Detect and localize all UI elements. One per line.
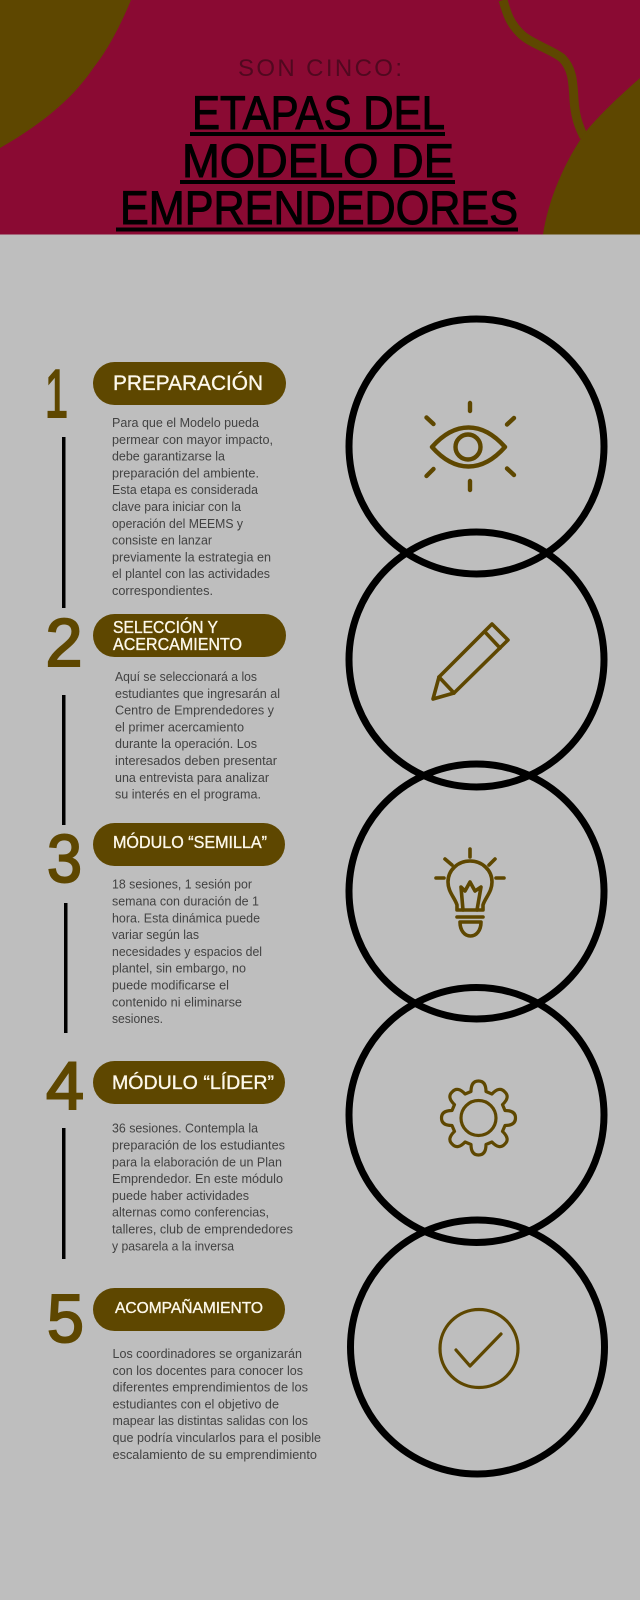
body text 3: [112, 877, 262, 1026]
body text 1: Esta etapa es considerada: [112, 482, 259, 497]
decorative blob: bottom right: [543, 78, 640, 234]
step 1: [45, 356, 286, 608]
heading pill: selección y acercamiento: ACERCAMIENTO: [113, 634, 242, 654]
body text 2: su interés en el programa.: [115, 787, 261, 802]
step 2: [46, 605, 286, 825]
body text 5: con los docentes para conocer los: [112, 1363, 303, 1378]
decorative blob: top left: [0, 0, 131, 148]
title: MODELO DE: [182, 134, 454, 187]
heading pill: acompañamiento: [93, 1288, 285, 1331]
body text 4: talleres, club de emprendedores: [112, 1222, 293, 1236]
overlapping circles chain: [349, 319, 604, 1474]
icon: pencil: [433, 624, 508, 699]
body text 2: interesados deben presentar: [115, 753, 278, 768]
step 5: [47, 1281, 321, 1462]
connector line 4: [62, 1128, 66, 1259]
body text 1: consiste en lanzar: [112, 533, 213, 548]
body text 3: variar según las: [112, 927, 199, 942]
icon: check mark in circle: [440, 1310, 518, 1388]
body text 3: hora. Esta dinámica puede: [112, 910, 260, 925]
heading pill: módulo líder: MÓDULO “LÍDER”: [112, 1071, 274, 1094]
number 2: 2: [46, 605, 82, 681]
body text 4: preparación de los estudiantes: [112, 1138, 285, 1152]
body text 1: clave para iniciar con la: [112, 499, 242, 514]
body text 1: operación del MEEMS y: [112, 516, 243, 531]
body text 5: [112, 1346, 321, 1462]
body text 2: estudiantes que ingresarán al: [115, 686, 280, 701]
body text 5: escalamiento de su emprendimiento: [112, 1447, 317, 1462]
body text 5: que podría vincularlos para el posible: [112, 1430, 321, 1445]
heading pill: módulo semilla: MÓDULO “SEMILLA”: [113, 831, 267, 852]
header banner: [0, 0, 640, 234]
body text 5: estudiantes con el objetivo de: [112, 1396, 279, 1411]
body text 3: 18 sesiones, 1 sesión por: [112, 877, 253, 892]
body text 1: el plantel con las actividades: [112, 566, 270, 581]
body text 2: Centro de Emprendedores y: [115, 703, 274, 718]
connector line 2: [62, 695, 66, 825]
body text 5: mapear las distintas salidas con los: [112, 1413, 308, 1428]
heading pill: selección y acercamiento: SELECCIÓN Y: [113, 616, 218, 637]
body text 4: 36 sesiones. Contempla la: [112, 1121, 259, 1136]
title: [116, 86, 518, 234]
body text 3: semana con duración de 1: [112, 894, 259, 908]
connector line 1: [62, 437, 66, 608]
heading pill: módulo líder: [93, 1061, 285, 1104]
body text 2: el primer acercamiento: [115, 719, 244, 734]
body text 4: y pasarela a la inversa: [112, 1238, 235, 1253]
heading pill: preparación: [93, 362, 286, 405]
step 4: [46, 1048, 293, 1259]
icon: light bulb: [436, 849, 504, 936]
body text 1: previamente la estrategia en: [112, 549, 271, 564]
connector line 3: [64, 903, 68, 1033]
heading pill: selección y acercamiento: [93, 614, 286, 657]
body text 3: necesidades y espacios del: [112, 944, 262, 959]
number 4: 4: [46, 1048, 84, 1124]
body text 5: Los coordinadores se organizarán: [112, 1346, 302, 1361]
subtitle: SON CINCO:: [238, 55, 402, 82]
number 3: 3: [47, 821, 82, 897]
body text 1: permear con mayor impacto,: [112, 432, 273, 447]
body text 3: contenido ni eliminarse: [112, 994, 242, 1009]
body text 1: Para que el Modelo pueda: [112, 415, 260, 430]
body text 2: Aquí se seleccionará a los: [115, 669, 257, 684]
body text 2: [115, 669, 280, 802]
body text 4: para la elaboración de un Plan: [112, 1154, 282, 1169]
number 1: 1: [45, 356, 68, 432]
icon: eye: [426, 403, 514, 490]
number 5: 5: [47, 1281, 84, 1357]
body text 4: puede haber actividades: [112, 1188, 249, 1203]
decorative squiggle: [503, 0, 584, 137]
body text 4: alternas como conferencias,: [112, 1205, 269, 1220]
title: ETAPAS DEL: [192, 86, 445, 139]
icon: gear: [442, 1081, 516, 1155]
title: EMPRENDEDORES: [120, 181, 518, 234]
heading pill: módulo semilla: [93, 823, 285, 866]
body text 1: [112, 415, 273, 598]
body text 4: [112, 1121, 293, 1253]
body text 1: debe garantizarse la: [112, 449, 226, 464]
body text 5: diferentes emprendimientos de los: [112, 1380, 308, 1395]
step 3: [47, 821, 285, 1033]
body text 3: plantel, sin embargo, no: [112, 961, 246, 976]
body text 3: puede modificarse el: [112, 978, 229, 992]
body text 3: sesiones.: [112, 1011, 163, 1026]
body text 4: Emprendedor. En este módulo: [112, 1171, 283, 1186]
heading pill: preparación: PREPARACIÓN: [113, 372, 263, 395]
heading pill: acompañamiento: ACOMPAÑAMIENTO: [115, 1297, 263, 1317]
body text 2: durante la operación. Los: [115, 736, 257, 751]
body text 1: correspondientes.: [112, 583, 213, 598]
body text 2: una entrevista para analizar: [115, 770, 270, 785]
body text 1: preparación del ambiente.: [112, 465, 259, 480]
